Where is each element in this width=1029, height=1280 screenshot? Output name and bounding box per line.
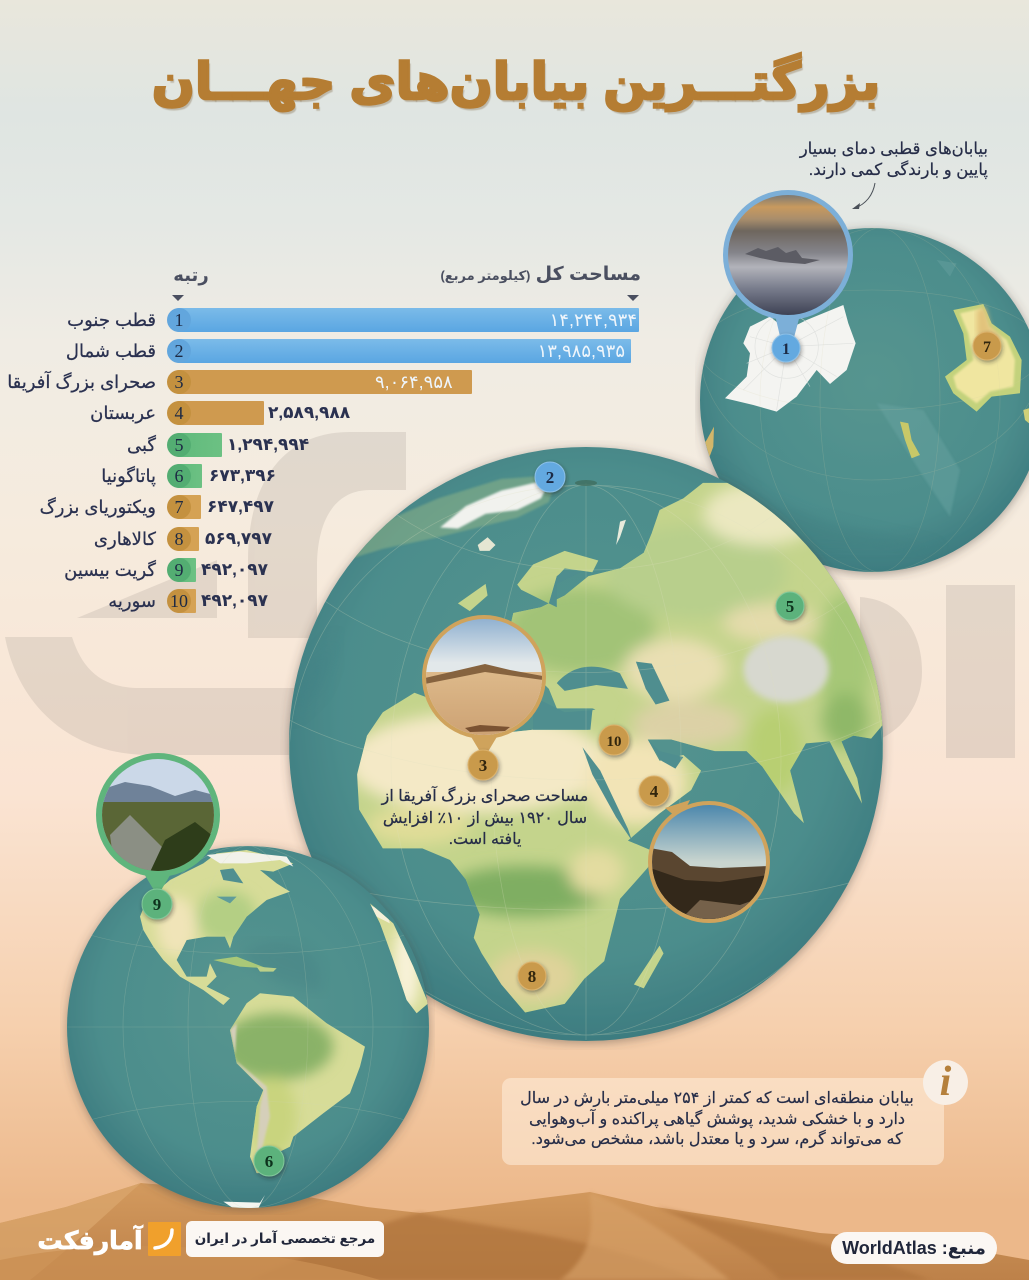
row 9: ۴۹۲,۰۹۷ <box>201 560 268 579</box>
row 6: پاتاگونیا <box>101 466 156 486</box>
row 10 <box>108 589 268 613</box>
title: بزرگتـــرین بیابان‌های جهـــان <box>152 53 880 110</box>
callout: Sahara growth: یافته است. <box>449 831 521 848</box>
note: polar deserts: پایین و بارندگی کمی دارند. <box>809 161 988 179</box>
photo callout: Antarctica <box>723 190 853 345</box>
info text <box>520 1090 914 1148</box>
row 2 <box>66 339 631 363</box>
row 9: 9 <box>174 560 184 580</box>
pin 9: 9 <box>153 895 161 914</box>
row 9: گریت بیسین <box>64 560 156 580</box>
row 10: ۴۹۲,۰۹۷ <box>201 591 268 610</box>
row 8 <box>94 527 272 551</box>
row 5 <box>127 433 309 457</box>
marker: area column <box>627 295 639 301</box>
row 3: 3 <box>174 372 184 392</box>
row 3 <box>7 370 472 394</box>
pin 8: 8 <box>528 967 536 986</box>
row 8: کالاهاری <box>94 529 156 549</box>
pin 5 <box>776 592 804 620</box>
pin 7: 7 <box>983 339 991 356</box>
row 9 <box>64 558 268 582</box>
tagline pill <box>186 1221 384 1257</box>
globe: the Americas <box>61 753 435 1215</box>
row 2: 2 <box>174 341 184 361</box>
row 1: 1 <box>174 310 184 330</box>
callout: Sahara growth: مساحت صحرای بزرگ آفریقا از <box>382 788 588 805</box>
water bodies <box>533 570 683 841</box>
column heading: total area: مساحت کل (کیلومتر مربع) <box>440 264 641 285</box>
logo icon <box>148 1222 181 1256</box>
info text: که می‌تواند گرم، سرد و یا معتدل باشد، مشخص می‌شود. <box>531 1131 903 1148</box>
row 7: ۶۴۷,۴۹۷ <box>207 497 274 516</box>
row 7 <box>40 495 274 519</box>
arrow: note to photo <box>852 182 876 209</box>
row 5: ۱,۲۹۴,۹۹۴ <box>227 435 309 454</box>
note: polar deserts: بیابان‌های قطبی دمای بسیار <box>800 140 988 158</box>
bar chart: ten largest deserts <box>7 308 639 613</box>
pin 2 <box>535 462 565 492</box>
row 4 <box>90 401 350 425</box>
logo wordmark: آمارفکت <box>37 1227 143 1255</box>
row 1: ۱۴,۲۴۴,۹۳۴ <box>550 310 637 330</box>
marker: rank column <box>172 295 184 301</box>
pin 3: 3 <box>479 756 487 775</box>
pin 1 <box>772 334 800 362</box>
photo callout: Great Basin <box>96 753 220 892</box>
globe: Antarctica and Australia <box>695 190 1029 580</box>
row 6 <box>101 464 276 488</box>
pin 4 <box>639 776 669 806</box>
column heading: rank: رتبه <box>173 265 209 285</box>
row 10: سوریه <box>108 591 156 611</box>
info text: دارد و با خشکی شدید، پوشش گیاهی پراکنده و آب‌وهوایی <box>529 1110 905 1128</box>
row 7: 7 <box>174 497 184 517</box>
row 8: 8 <box>174 529 184 549</box>
photo callout: Arabian desert <box>648 800 770 923</box>
pin 5: 5 <box>786 597 794 616</box>
pin 8 <box>518 962 546 990</box>
tagline pill: مرجع تخصصی آمار در ایران <box>195 1231 375 1246</box>
pin 7 <box>973 332 1001 360</box>
row 3: صحرای بزرگ آفریقا <box>7 372 156 392</box>
info panel: definition of a desert <box>502 1078 944 1165</box>
row 3: ۹,۰۶۴,۹۵۸ <box>375 372 453 392</box>
icon: info <box>923 1060 968 1105</box>
source pill: منبع: WorldAtlas <box>842 1238 986 1258</box>
info text: بیابان منطقه‌ای است که کمتر از ۲۵۴ میلی‌متر بارش در سال <box>520 1090 914 1107</box>
row 2: ۱۳,۹۸۵,۹۳۵ <box>538 341 625 361</box>
photo callout: Sahara <box>422 615 546 755</box>
icon: info: i <box>940 1059 951 1105</box>
row 8: ۵۶۹,۷۹۷ <box>205 529 272 548</box>
pin 10 <box>599 725 629 755</box>
Greenland and Arctic land <box>354 476 552 558</box>
pin 4: 4 <box>650 782 659 801</box>
pin 6 <box>254 1146 284 1176</box>
row 4: ۲,۵۸۹,۹۸۸ <box>268 403 350 422</box>
pin 6: 6 <box>265 1152 273 1171</box>
callout: Sahara growth <box>380 786 588 848</box>
pin 2: 2 <box>546 468 554 487</box>
globe: Europe, Asia and Africa <box>283 442 890 1048</box>
note: polar deserts <box>798 140 988 180</box>
row 6: 6 <box>174 466 184 486</box>
row 1 <box>67 308 639 332</box>
row 10: 10 <box>170 591 188 611</box>
pin 10: 10 <box>606 734 622 750</box>
row 1: قطب جنوب <box>67 310 156 330</box>
pin 9 <box>142 889 172 919</box>
callout: Sahara growth: سال ۱۹۲۰ بیش از ۱۰٪ افزایش <box>383 810 587 826</box>
row 5: گبی <box>127 435 156 455</box>
row 4: عربستان <box>90 403 156 423</box>
row 2: قطب شمال <box>66 341 156 361</box>
source pill <box>831 1232 997 1264</box>
row 6: ۶۷۳,۳۹۶ <box>209 466 276 485</box>
pin 1: 1 <box>782 341 790 358</box>
pin 3 <box>468 750 498 780</box>
row 4: 4 <box>174 403 184 423</box>
row 5: 5 <box>174 435 184 455</box>
row 7: ویکتوریای بزرگ <box>40 497 156 517</box>
